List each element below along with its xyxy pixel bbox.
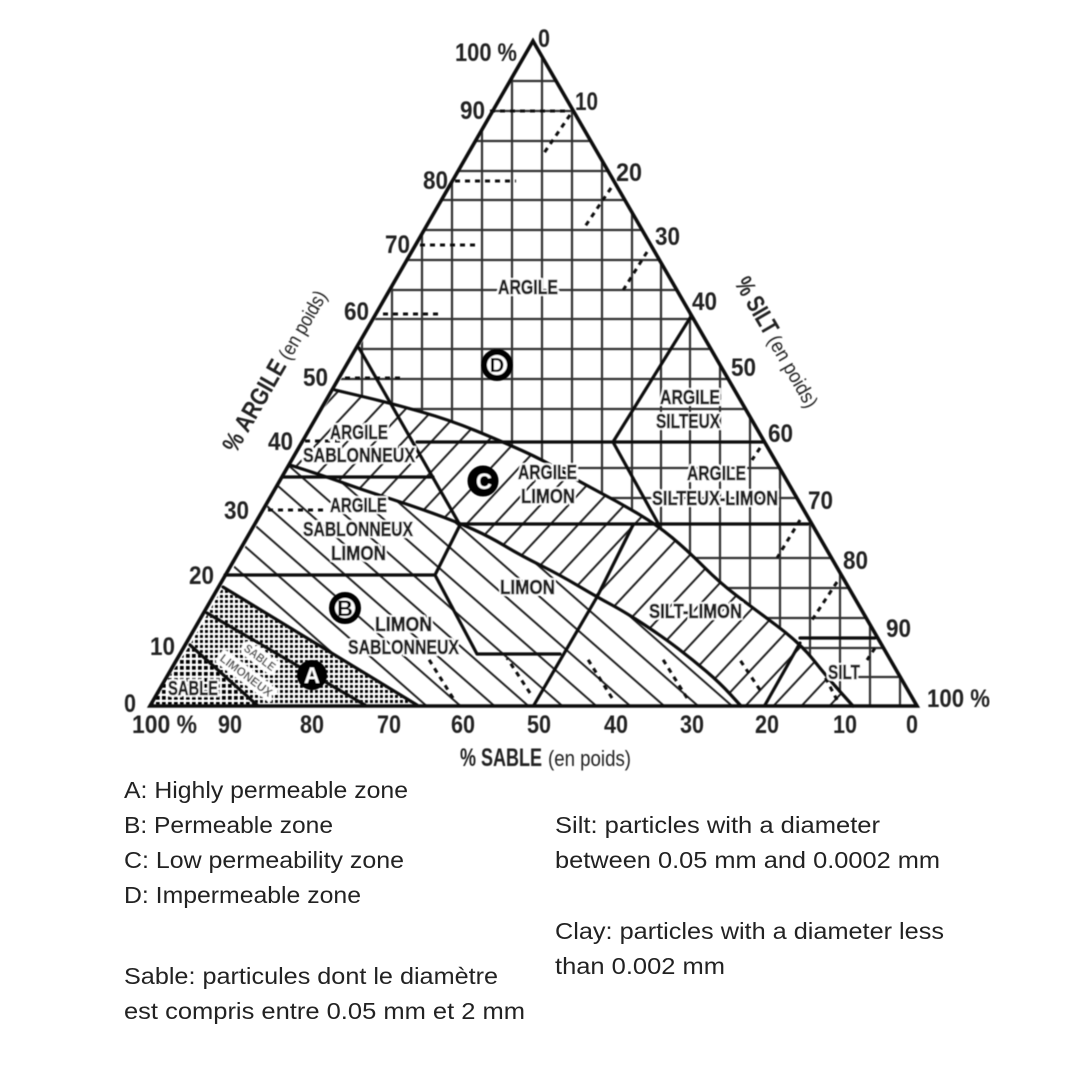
axis title: % silt: (en poids)	[763, 332, 822, 412]
clay grid	[340, 58, 902, 706]
axis title: % sable	[460, 744, 631, 772]
bottom axis numbers: % sable: 100 %	[132, 711, 197, 739]
region labels: SABLONNEUX	[303, 445, 416, 467]
legend: permeability zones: D: Impermeable zone	[124, 882, 361, 908]
note: clay	[555, 918, 944, 979]
left axis numbers: % argile	[124, 39, 517, 718]
zone marker A: A	[304, 663, 320, 688]
region labels: LIMONEUX	[217, 651, 275, 700]
dotted guide lines	[268, 111, 875, 700]
region labels: ARGILE	[498, 277, 558, 299]
zone marker C	[470, 468, 496, 494]
note: sable	[124, 963, 525, 1024]
triangle outline	[150, 41, 917, 706]
region labels: ARGILE	[660, 387, 720, 409]
left axis numbers: % argile: 20	[189, 562, 214, 590]
bottom axis numbers: % sable: 40	[604, 711, 628, 739]
axis title: % silt	[729, 272, 826, 412]
axis title: % argile: % ARGILE	[217, 355, 292, 457]
axis title: % sable: % SABLE	[460, 744, 542, 772]
zone marker B: B	[337, 596, 353, 621]
zone marker C: C	[476, 469, 492, 494]
right axis numbers: % silt	[538, 25, 990, 713]
region labels: ARGILE	[518, 462, 577, 484]
legend: permeability zones	[124, 777, 408, 908]
left axis numbers: % argile: 50	[303, 364, 328, 392]
right axis numbers: % silt: 10	[575, 88, 598, 116]
soil texture figure	[124, 28, 990, 1024]
bottom axis numbers: % sable: 90	[218, 711, 242, 739]
note: clay: than 0.002 mm	[555, 953, 725, 979]
left axis numbers: % argile: 10	[150, 633, 175, 661]
region labels: LIMON	[500, 577, 555, 599]
region labels: ARGILE	[687, 463, 746, 485]
bottom axis numbers: % sable: 10	[833, 711, 857, 739]
region labels: SILTEUX-LIMON	[652, 488, 778, 510]
note: silt: Silt: particles with a diameter	[555, 812, 880, 838]
bottom axis numbers: % sable: 70	[377, 711, 401, 739]
region labels: ARGILE	[330, 495, 387, 517]
region labels: LIMON	[375, 614, 432, 636]
region labels: SABLE	[168, 678, 218, 700]
region labels: LIMON	[331, 543, 386, 565]
zone C hatching	[290, 390, 853, 706]
note: silt: between 0.05 mm and 0.0002 mm	[555, 847, 940, 873]
note: sable: est compris entre 0.05 mm et 2 mm	[124, 998, 525, 1024]
right axis numbers: % silt: 0	[538, 25, 550, 53]
left axis numbers: % argile: 30	[224, 497, 249, 525]
region labels: SILT	[828, 662, 860, 684]
legend: permeability zones: B: Permeable zone	[124, 812, 333, 838]
left axis numbers: % argile: 70	[385, 231, 410, 259]
right axis numbers: % silt: 40	[692, 288, 717, 316]
right axis numbers: % silt: 20	[616, 159, 642, 187]
soil class boundaries	[190, 318, 875, 706]
right axis numbers: % silt: 100 %	[927, 685, 990, 713]
bottom axis numbers: % sable: 50	[527, 711, 551, 739]
sable dotted fill	[150, 645, 257, 706]
left axis numbers: % argile: 90	[460, 97, 485, 125]
right axis numbers: % silt: 30	[655, 223, 680, 251]
region labels: SABLONNEUX	[348, 637, 460, 659]
axis title: % argile	[217, 285, 333, 457]
left axis numbers: % argile: 100 %	[455, 39, 517, 67]
axis title: % argile: (en poids)	[275, 287, 332, 364]
note: clay: Clay: particles with a diameter less	[555, 918, 944, 944]
bottom axis numbers: % sable: 0	[906, 711, 918, 739]
note: silt	[555, 812, 940, 873]
region labels: SABLE	[241, 641, 278, 674]
right axis numbers: % silt: 70	[808, 487, 833, 515]
region labels: ARGILE	[330, 422, 388, 444]
right axis numbers: % silt: 50	[731, 354, 756, 382]
left axis numbers: % argile: 0	[124, 690, 136, 718]
left axis numbers: % argile: 40	[268, 428, 293, 456]
legend: permeability zones: A: Highly permeable zone	[124, 777, 408, 803]
region labels: SILTEUX	[656, 411, 721, 433]
zone marker D	[484, 352, 510, 378]
note: sable: Sable: particules dont le diamètre	[124, 963, 498, 989]
right axis numbers: % silt: 80	[843, 547, 868, 575]
zone B hatching	[223, 465, 741, 706]
bottom axis numbers: % sable	[132, 711, 918, 739]
zone marker A	[297, 660, 327, 690]
legend: permeability zones: C: Low permeability zone	[124, 847, 404, 873]
right axis numbers: % silt: 60	[768, 420, 793, 448]
ternary diagram	[100, 25, 990, 772]
zone marker D: D	[490, 355, 504, 377]
axis title: % sable: (en poids)	[548, 746, 631, 771]
region labels: LIMON	[521, 486, 575, 508]
right axis numbers: % silt: 90	[886, 615, 911, 643]
bottom axis numbers: % sable: 60	[451, 711, 475, 739]
left axis numbers: % argile: 80	[423, 167, 448, 195]
zone marker B	[332, 595, 358, 621]
region labels	[168, 277, 860, 700]
region labels: SABLONNEUX	[303, 519, 414, 541]
bottom axis numbers: % sable: 80	[300, 711, 324, 739]
region labels: SILT-LIMON	[649, 601, 742, 623]
zone A dotted fill	[190, 587, 417, 706]
bottom axis numbers: % sable: 20	[755, 711, 779, 739]
bottom axis numbers: % sable: 30	[680, 711, 704, 739]
axis title: % silt: % SILT	[729, 272, 784, 340]
left axis numbers: % argile: 60	[344, 298, 369, 326]
